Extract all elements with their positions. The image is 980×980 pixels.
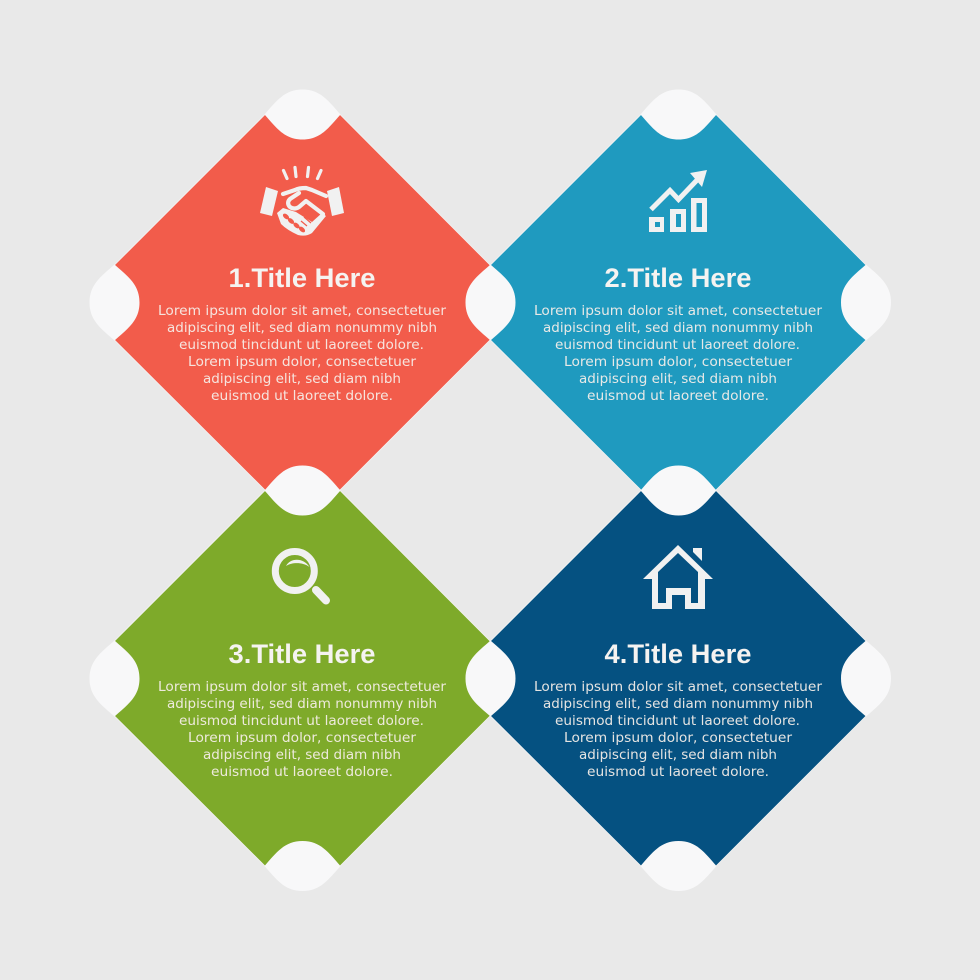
text block 1: euismod ut laoreet dolore. <box>211 389 393 404</box>
text block 1: Lorem ipsum dolor sit amet, consectetuer <box>158 304 447 319</box>
text block 3 <box>158 680 447 780</box>
icon: growth chart <box>649 170 707 232</box>
text block 2: euismod ut laoreet dolore. <box>587 389 769 404</box>
text block 3: adipiscing elit, sed diam nonummy nibh <box>167 697 437 712</box>
panel: 1 red diamond <box>114 114 490 490</box>
text block 4: adipiscing elit, sed diam nibh <box>579 748 777 763</box>
text block 4: euismod tincidunt ut laoreet dolore. <box>555 714 800 729</box>
text block 3: adipiscing elit, sed diam nibh <box>203 748 401 763</box>
text block 2: Lorem ipsum dolor, consectetuer <box>564 355 793 370</box>
text block 4: euismod ut laoreet dolore. <box>587 765 769 780</box>
panel: 2 blue diamond <box>490 114 866 490</box>
text block 3: euismod tincidunt ut laoreet dolore. <box>179 714 424 729</box>
text block 1: euismod tincidunt ut laoreet dolore. <box>179 338 424 353</box>
text block 2: euismod tincidunt ut laoreet dolore. <box>555 338 800 353</box>
text block 2: adipiscing elit, sed diam nonummy nibh <box>543 321 813 336</box>
text block 2: Lorem ipsum dolor sit amet, consectetuer <box>534 304 823 319</box>
title 3: 3.Title Here <box>228 639 376 669</box>
panel: 3 green diamond <box>114 490 490 866</box>
text block 3: Lorem ipsum dolor, consectetuer <box>188 731 417 746</box>
icon: handshake <box>260 168 344 236</box>
text block 1: adipiscing elit, sed diam nonummy nibh <box>167 321 437 336</box>
text block 2 <box>534 304 823 404</box>
text block 3: Lorem ipsum dolor sit amet, consectetuer <box>158 680 447 695</box>
text block 4: Lorem ipsum dolor, consectetuer <box>564 731 793 746</box>
panel: 4 navy diamond <box>490 490 866 866</box>
connectors: white lens shapes <box>90 90 891 891</box>
title 1: 1.Title Here <box>228 263 376 293</box>
icon: house <box>643 545 713 609</box>
text block 4: Lorem ipsum dolor sit amet, consectetuer <box>534 680 823 695</box>
text block 3: euismod ut laoreet dolore. <box>211 765 393 780</box>
text block 1 <box>158 304 447 404</box>
title 2: 2.Title Here <box>604 263 752 293</box>
icon: magnifying glass <box>275 552 326 600</box>
text block 1: adipiscing elit, sed diam nibh <box>203 372 401 387</box>
text block 1: Lorem ipsum dolor, consectetuer <box>188 355 417 370</box>
text block 2: adipiscing elit, sed diam nibh <box>579 372 777 387</box>
title 4: 4.Title Here <box>604 639 752 669</box>
text block 4: adipiscing elit, sed diam nonummy nibh <box>543 697 813 712</box>
text block 4 <box>534 680 823 780</box>
